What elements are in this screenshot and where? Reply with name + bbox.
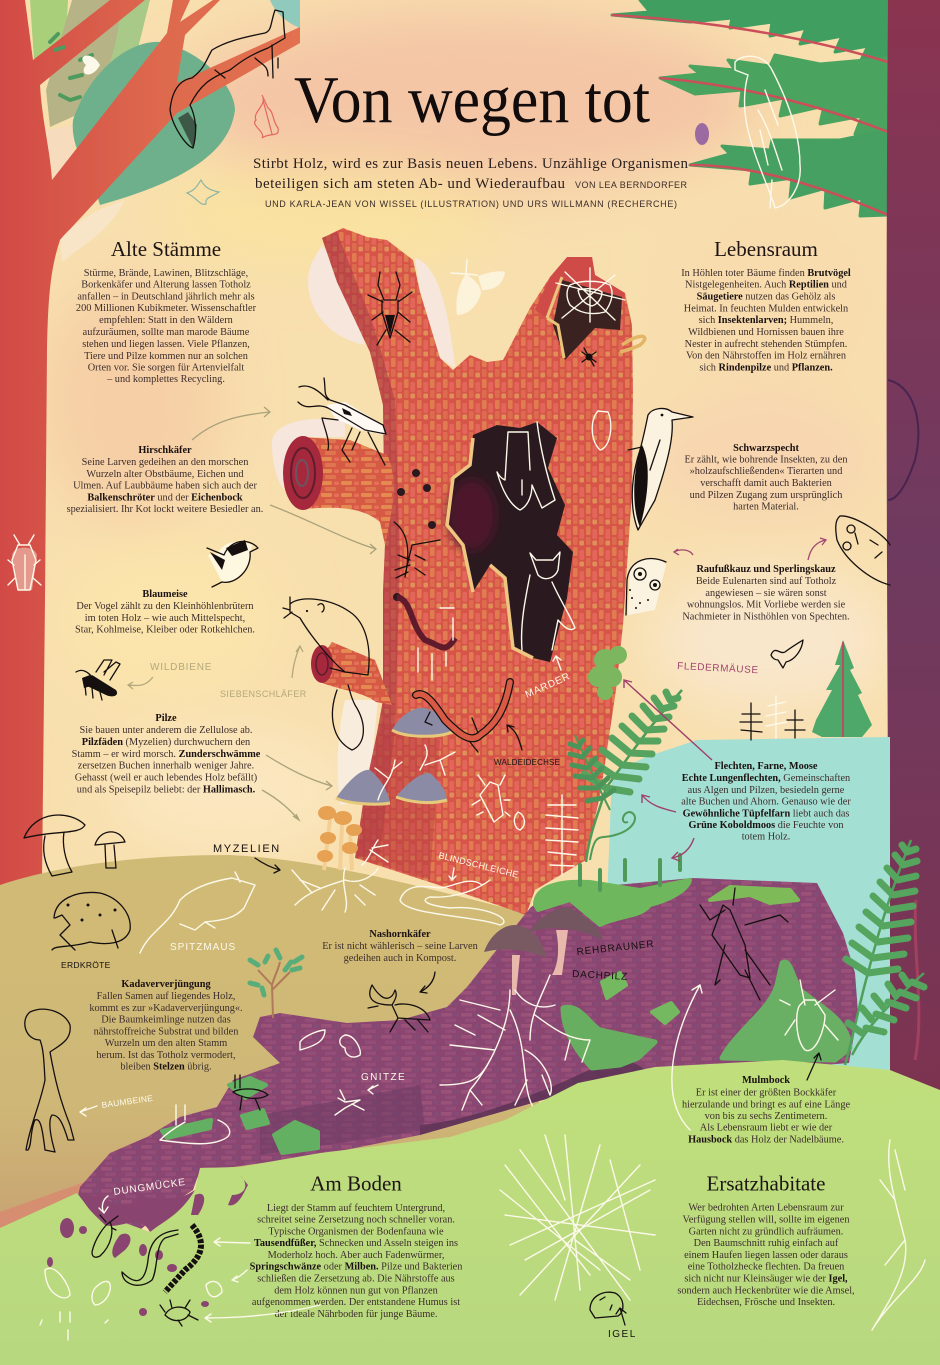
illustration: dormouse: [283, 597, 369, 675]
text block: Lebensraum: sich Rindenpilze und Pflanzen.: [699, 362, 833, 374]
text block: Hirschkäfer: Ulmen. Auf Laubbäume haben sich auch der: [73, 480, 257, 492]
arrow: Waldeidechse: [507, 725, 522, 750]
illustration: seedling: [250, 950, 302, 1018]
arrow: Blindschleiche: [449, 868, 456, 880]
text block: Pilze: Gehasst (weil er auch lebendes Holz befällt): [75, 772, 257, 784]
arrow: Igel: [616, 1308, 626, 1325]
panel: teal pond: [600, 737, 890, 1080]
icon: teal leaf outline: [187, 180, 219, 204]
text block: Hirschkäfer: Balkenschröter und der Eichenbock: [87, 492, 243, 504]
label: Myzelien: MYZELIEN: [213, 843, 281, 855]
illustration: squirrel on branch: [170, 10, 285, 148]
text block: Hirschkäfer: Wurzeln alter Obstbäume, Eichen und: [86, 469, 244, 480]
text block: Alte Stämme: Alte Stämme: [111, 237, 221, 261]
illustration: moss on log: [162, 855, 850, 1153]
text block: Flechten, Farne, Moose: alte Buchen und Ahorn. Genauso wie der: [681, 796, 851, 808]
illustration: white larch: [546, 795, 578, 875]
text block: Alte Stämme: Borkenkäfer und Alterung lassen Totholz: [81, 280, 251, 290]
text block: Am Boden: Moderholz hoch. Aber auch Fadenwürmer,: [268, 1250, 444, 1261]
text block: Alte Stämme: Orten vor. Sie sorgen für Artenvielfalt: [88, 362, 244, 374]
text block: Ersatzhabitate: Den Baumschnitt ruhig einfach auf: [694, 1238, 839, 1249]
arrows: Am Boden white: [205, 1238, 320, 1322]
text block: Raufußkauz und Sperlingskauz: wohnungslos. Mit Vorliebe werden sie: [687, 600, 846, 610]
illustration: dachpilz mushrooms: [484, 907, 603, 995]
illustration: millipede on trunk: [394, 522, 440, 578]
icon: woodpecker holes: [393, 469, 436, 601]
illustration: bracket fungi: [336, 708, 452, 804]
text block: Lebensraum: Wildbienen und Hornissen bauen ihre: [688, 327, 844, 338]
illustration: springtail: [160, 1105, 230, 1144]
text block: Lebensraum: In Höhlen toter Bäume finden Brutvögel: [681, 268, 851, 279]
text block: Pilze: Stamm – er wird morsch. Zunderschwämme: [72, 749, 261, 760]
text block: Flechten, Farne, Moose: Gewöhnliche Tüpfelfarn liebt auch das: [683, 808, 849, 820]
text block: Kadaververjüngung: Fallen Samen auf liegendes Holz,: [97, 991, 235, 1002]
illustration: fallen purple log: [77, 878, 858, 1230]
text block: Am Boden: aufgenommen werden. Der entstandene Humus ist: [252, 1297, 460, 1308]
subtitle: beteiligen sich am steten Ab- und Wiederaufbau: [255, 176, 566, 192]
text block: Nashornkäfer: Er ist nicht wählerisch – seine Larven: [322, 941, 478, 952]
arrow: Siebenschläfer: [292, 646, 303, 678]
panel: right tree trunk: [887, 0, 940, 1100]
illustration: millipede: [165, 1225, 201, 1292]
arrow: Hausbock white: [672, 985, 702, 1130]
text block: Lebensraum: Von den Nährstoffen im Holz ernähren: [686, 350, 846, 362]
text block: Lebensraum: Heimat. In feuchten Mulden entwickeln: [684, 304, 848, 314]
illustration: stick heap: [500, 1135, 655, 1300]
illustration: upper side stub: [283, 436, 394, 545]
text block: Ersatzhabitate: sich nicht nur Kleinsäuger wie der Igel,: [684, 1274, 848, 1284]
arrow: Baumbeine: [80, 1106, 97, 1116]
illustration: small trees on horizon: [740, 640, 872, 740]
illustration: left white beetle: [8, 535, 41, 590]
text block: Am Boden: schreitet seine Zersetzung noch schneller voran.: [257, 1214, 455, 1226]
label: Rehbrauner Dachpilz: REHBRAUNER: [576, 939, 655, 958]
illustration: white branch right: [872, 1140, 925, 1330]
text block: Ersatzhabitate: eine Totholzhecke flechten. Da freuen: [688, 1262, 844, 1272]
text block: Ersatzhabitate: sondern auch Heckenbrüter wie die Amsel,: [677, 1286, 855, 1296]
arrow: Dungmücke: [99, 1196, 108, 1213]
illustration: wild bee: [76, 660, 120, 700]
text block: Raufußkauz und Sperlingskauz: angewiesen – sie wären sonst: [705, 588, 827, 599]
illustration: white mycelium roots: [440, 975, 590, 1110]
title: Von wegen tot: [294, 63, 650, 137]
illustration: hedgehog: [590, 1292, 623, 1318]
icon: bat outline: [771, 640, 803, 668]
label: Siebenschläfer: SIEBENSCHLÄFER: [220, 689, 307, 699]
text block: Kadaververjüngung: herum. Ist das Totholz vermodert,: [96, 1050, 236, 1061]
text block: Am Boden: schließen die Zersetzung ab. Die Nährstoffe aus: [257, 1274, 455, 1284]
label: Rehbrauner Dachpilz: [572, 939, 655, 983]
text block: Alte Stämme: 200 Millionen Kubikmeter. Wissenschaftler: [76, 303, 257, 314]
illustration: salamander: [416, 682, 510, 752]
text block: Lebensraum: [681, 237, 851, 374]
illustration: beetle on log: [233, 1075, 268, 1110]
illustration: white larvae: [418, 411, 611, 680]
illustration: dung midge: [92, 1215, 118, 1257]
illustration: white log critters: [300, 1030, 364, 1115]
illustration: slow worm: [400, 880, 504, 925]
text block: Raufußkauz und Sperlingskauz: Nachmieter in Nisthöhlen von Spechten.: [682, 612, 850, 622]
illustration: lower side stub: [311, 642, 392, 705]
text block: Nashornkäfer: [322, 929, 478, 964]
subtitle: [253, 156, 688, 192]
text block: Schwarzspecht: und Pilzen Zugang zum ursprünglich: [690, 490, 843, 501]
label: Igel: IGEL: [608, 1329, 637, 1340]
label: Fledermäuse: FLEDERMÄUSE: [677, 660, 759, 676]
illustration: honey fungus: [317, 806, 362, 870]
illustration: blue tit: [207, 540, 258, 587]
arrow: Mulmbock: [807, 1053, 821, 1080]
text block: Am Boden: der ideale Nährboden für junge Bäume.: [275, 1309, 437, 1320]
text block: Ersatzhabitate: Ersatzhabitate: [707, 1172, 825, 1196]
text block: Am Boden: dem Holz können nun gut von Pflanzen: [274, 1286, 438, 1296]
icon: tiny spider: [582, 348, 596, 366]
text block: Mulmbock: Hausbock das Holz der Nadelbäume.: [688, 1134, 844, 1146]
text block: Ersatzhabitate: Eidechsen, Frösche und Insekten.: [697, 1297, 835, 1308]
illustration: white eagle outline: [735, 56, 800, 208]
label: Marder: MARDER: [524, 671, 572, 701]
text block: Alte Stämme: anfallen – in Deutschland jährlich mehr als: [77, 292, 255, 302]
text block: Ersatzhabitate: [677, 1172, 855, 1308]
illustration: stilt tree: [25, 1009, 74, 1152]
pale halos around trunk: [272, 245, 455, 805]
text block: Am Boden: Am Boden: [310, 1172, 402, 1196]
label: Gnitze: GNITZE: [361, 1072, 406, 1083]
arrow: Wildbiene: [128, 677, 153, 689]
text block: Mulmbock: Als Lebensraum liebt er wie der: [700, 1122, 833, 1134]
text block: Blaumeise: Star, Kohlmeise, Kleiber oder Rotkehlchen.: [75, 624, 255, 636]
text block: Mulmbock: Mulmbock: [742, 1075, 790, 1086]
illustration: white beetles on trunk: [472, 775, 524, 830]
illustration: dead standing trunk: [322, 228, 645, 915]
text block: Schwarzspecht: harten Material.: [733, 502, 799, 512]
arrows: Pilze to fungi: [262, 755, 332, 820]
text block: Lebensraum: Lebensraum: [714, 237, 818, 261]
text block: Pilze: Sie bauen unter anderem die Zellulose ab.: [80, 725, 252, 736]
text block: Blaumeise: im toten Holz – wie auch Mittelspecht,: [85, 613, 245, 624]
text block: Schwarzspecht: »holzaufschließenden« Tierarten und: [690, 466, 843, 477]
text block: Pilze: und als Speisepilz beliebt: der Hallimasch.: [77, 784, 256, 796]
text block: Pilze: zersetzen Buchen innerhalb weniger Jahre.: [78, 760, 254, 772]
illustration: rhinoceros beetle: [368, 985, 430, 1032]
text block: Alte Stämme: Stürme, Brände, Lawinen, Blitzschläge,: [84, 268, 248, 279]
byline: VON LEA BERNDORFER: [575, 180, 688, 190]
illustration: big stag beetle on stub: [298, 378, 386, 465]
arrow: Hirschkäfer to trunk beetle: [270, 505, 376, 554]
text block: Alte Stämme: stehen und liegen lassen. Viele Pflanzen,: [82, 339, 250, 350]
illustration: longhorn beetle black: [700, 888, 788, 1000]
illustration: woodpecker: [628, 408, 693, 530]
label: Erdkröte: ERDKRÖTE: [61, 960, 111, 970]
label: Waldeidechse: WALDEIDECHSE: [494, 758, 560, 767]
arrow: Marder: [553, 656, 561, 670]
text block: Hirschkäfer: Seine Larven gedeihen an den morschen: [82, 457, 248, 468]
text block: Blaumeise: [75, 589, 255, 636]
text block: Flechten, Farne, Moose: aus Algen und Pilzen, besiedeln gerne: [688, 785, 845, 796]
text block: Am Boden: Tausendfüßer, Schnecken und Asseln steigen ins: [254, 1238, 458, 1249]
text block: Lebensraum: Nistgelegenheiten. Auch Reptilien und: [685, 280, 848, 290]
text block: Hirschkäfer: [67, 445, 263, 515]
text block: Kadaververjüngung: Wurzeln um den alten Stamm: [105, 1038, 227, 1049]
text block: Kadaververjüngung: Kadaververjüngung: [121, 979, 211, 990]
arrows: Flechten labels: [624, 680, 712, 861]
byline: UND KARLA-JEAN VON WISSEL (ILLUSTRATION) UND URS WILLMANN (RECHERCHE): [265, 199, 677, 209]
text block: Pilze: [72, 713, 261, 796]
illustration: nematode worm: [122, 1230, 178, 1285]
illustration: shrew: [140, 872, 255, 953]
text block: Kadaververjüngung: [89, 979, 243, 1072]
arrow: Gnitze: [368, 1085, 378, 1094]
icon: spider web: [556, 268, 625, 322]
label: Spitzmaus: SPITZMAUS: [170, 942, 236, 953]
illustration: small stag beetle on trunk: [368, 272, 412, 345]
text block: Flechten, Farne, Moose: [681, 761, 851, 842]
illustration: right fern: [845, 840, 924, 1065]
panel: upper left tree and leaves: [0, 0, 300, 895]
text block: Hirschkäfer: Hirschkäfer: [138, 445, 192, 456]
illustration: dormouse tail: [332, 685, 363, 750]
illustration: mulmbock white: [780, 980, 838, 1051]
text block: Kadaververjüngung: bleiben Stelzen übrig.: [120, 1062, 212, 1072]
illustration: spotted owl: [626, 558, 666, 615]
label: Wildbiene: WILDBIENE: [150, 662, 212, 673]
text block: Ersatzhabitate: einem Haufen liegen lassen oder daraus: [684, 1250, 848, 1261]
text block: Schwarzspecht: Er zählt, wie bohrende Insekten, zu den: [685, 454, 847, 466]
arrow: Myzelien: [255, 858, 280, 873]
text block: Ersatzhabitate: Verfügung stellen will, sollte im eigenen: [682, 1214, 850, 1226]
illustration: tree hollow: [447, 422, 573, 662]
label: Dungmücke: DUNGMÜCKE: [113, 1176, 186, 1198]
byline: [265, 180, 688, 209]
arrow: Nashornkäfer: [420, 972, 435, 993]
text block: Kadaververjüngung: nährstoffreiche Substrat und bilden: [94, 1026, 238, 1038]
text block: Schwarzspecht: [685, 443, 847, 512]
subtitle: Stirbt Holz, wird es zur Basis neuen Lebens. Unzählige Organismen: [253, 156, 688, 172]
icon: marten in hollow: [522, 552, 575, 650]
icon: red oak leaf outline: [255, 95, 278, 138]
panel: olive hill: [0, 855, 540, 1230]
text block: Pilze: Pilze: [155, 713, 177, 724]
text block: Mulmbock: hierzulande und bringt es auf eine Länge: [682, 1100, 850, 1110]
text block: Pilze: Pilzfäden (Myzelien) durchwuchern den: [82, 737, 250, 748]
text block: Alte Stämme: [76, 237, 257, 385]
text block: Ersatzhabitate: Garten nicht zu gründlich aufräumen.: [689, 1226, 843, 1238]
text block: Kadaververjüngung: kommt es zur »Kadaververjüngung«.: [89, 1003, 243, 1014]
text block: Kadaververjüngung: Die Baumkeimlinge nutzen das: [101, 1014, 231, 1026]
text block: Blaumeise: Blaumeise: [142, 589, 188, 600]
illustration: white roots in hill: [292, 868, 378, 912]
text block: Raufußkauz und Sperlingskauz: Beide Eulenarten sind auf Totholz: [696, 576, 837, 587]
text block: Am Boden: Springschwänze oder Milben. Pilze und Bakterien: [250, 1262, 462, 1272]
icon: white moth: [451, 260, 505, 315]
illustration: outlined mushrooms: [24, 815, 125, 876]
illustration: white microbes: [40, 1268, 222, 1340]
text block: Lebensraum: sich Insektenlarven; Hummeln,: [699, 315, 833, 326]
arrow: Hirschkäfer to stag beetle: [192, 407, 270, 440]
text block: Nashornkäfer: Nashornkäfer: [369, 929, 431, 940]
label: Rehbrauner Dachpilz: DACHPILZ: [572, 969, 628, 983]
text block: Raufußkauz und Sperlingskauz: [682, 564, 850, 622]
text block: Raufußkauz und Sperlingskauz: Raufußkauz und Sperlingskauz: [696, 564, 836, 575]
text block: Hirschkäfer: spezialisiert. Ihr Kot lockt weitere Besiedler an.: [67, 504, 263, 515]
illustration: debris blobs: [47, 1175, 248, 1316]
text block: Lebensraum: Säugetiere nutzen das Gehölz als: [697, 292, 835, 302]
panel: green foreground hill: [0, 1060, 940, 1365]
text block: Schwarzspecht: verschafft damit auch Bakterien: [700, 478, 832, 489]
text block: Alte Stämme: – und komplettes Recycling.: [106, 374, 225, 385]
label: Baumbeine: BAUMBEINE: [101, 1093, 154, 1110]
illustration: lungwort lichen: [588, 646, 627, 700]
text block: Schwarzspecht: Schwarzspecht: [733, 443, 799, 454]
text block: Lebensraum: Nester in aufrecht stehenden Stümpfen.: [685, 339, 847, 350]
text block: Alte Stämme: aufzuräumen, sollte man marode Bäume: [83, 327, 250, 338]
text block: Flechten, Farne, Moose: totem Holz.: [742, 832, 790, 842]
panel: upper right fir boughs: [612, 0, 888, 216]
illustration: mite: [160, 1300, 198, 1326]
illustration: left ferns: [570, 690, 682, 862]
illustration: white hyphae on trunk: [362, 745, 455, 865]
text block: Flechten, Farne, Moose: Flechten, Farne, Moose: [715, 761, 818, 772]
text block: Blaumeise: Der Vogel zählt zu den Kleinhöhlenbrütern: [76, 601, 254, 612]
arrows: owls: [674, 538, 826, 560]
text block: Flechten, Farne, Moose: Echte Lungenflechten, Gemeinschaften: [682, 773, 850, 784]
text block: Alte Stämme: empfehlen: Statt in den Wäldern: [99, 315, 233, 326]
text block: Mulmbock: von bis zu sechs Zentimetern.: [705, 1111, 827, 1122]
text block: Nashornkäfer: gedeihen auch in Kompost.: [344, 953, 456, 964]
text block: Am Boden: Typische Organismen der Bodenfauna wie: [268, 1226, 444, 1238]
text block: Mulmbock: [682, 1075, 850, 1146]
text block: Am Boden: Liegt der Stamm auf feuchtem Untergrund,: [267, 1203, 445, 1214]
text block: Flechten, Farne, Moose: Grüne Koboldmoos die Feuchte von: [688, 820, 844, 831]
text block: Am Boden: [250, 1172, 462, 1320]
text block: Mulmbock: Er ist einer der größten Bockkäfer: [696, 1088, 837, 1098]
illustration: toad: [52, 892, 130, 950]
text block: Alte Stämme: Tiere und Pilze kommen nur an solchen: [84, 351, 248, 362]
illustration: right owl outline: [836, 516, 890, 585]
text block: Ersatzhabitate: Wer bedrohten Arten Lebensraum zur: [688, 1202, 844, 1214]
label: Blindschleiche: BLINDSCHLEICHE: [438, 850, 520, 880]
icon: bat in hollow: [497, 422, 555, 510]
illustration: larva tunnel: [397, 597, 455, 648]
